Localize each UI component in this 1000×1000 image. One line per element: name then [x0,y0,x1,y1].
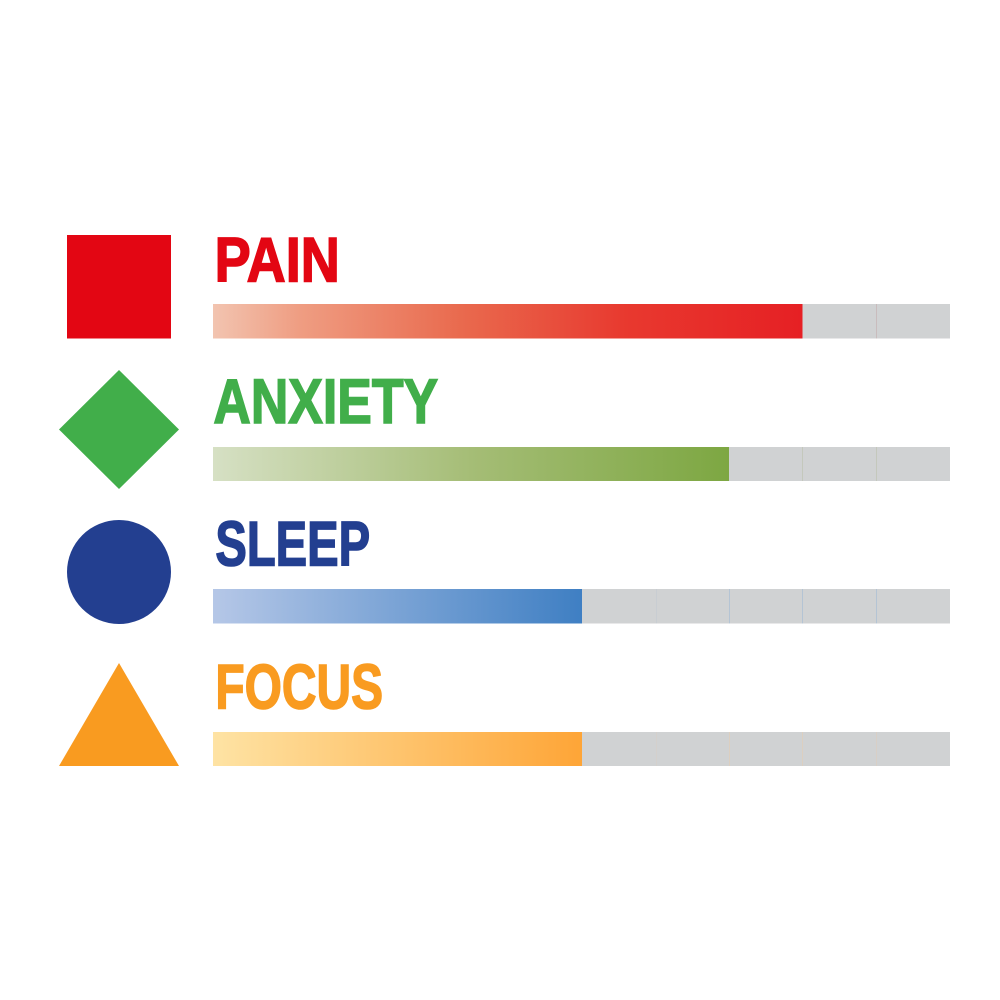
bar: anxiety rating 3.5 of 5 [213,447,950,481]
icon: orange triangle [59,663,179,766]
heading: anxiety: ANXIETY [213,367,438,437]
row: sleep [67,510,950,624]
icon: green diamond [59,370,179,489]
bar: pain rating 4 of 5 [213,304,950,338]
bar: focus rating 2.5 of 5 [213,732,950,766]
heading: pain: PAIN [215,226,340,296]
row: focus [59,652,950,766]
row: anxiety [59,367,950,489]
heading: sleep: SLEEP [215,510,370,580]
bar: sleep rating 2.5 of 5 [213,589,950,624]
heading: focus: FOCUS [215,652,383,722]
icon: red square [67,235,171,338]
icon: blue circle [67,520,171,624]
row: pain [67,226,950,338]
